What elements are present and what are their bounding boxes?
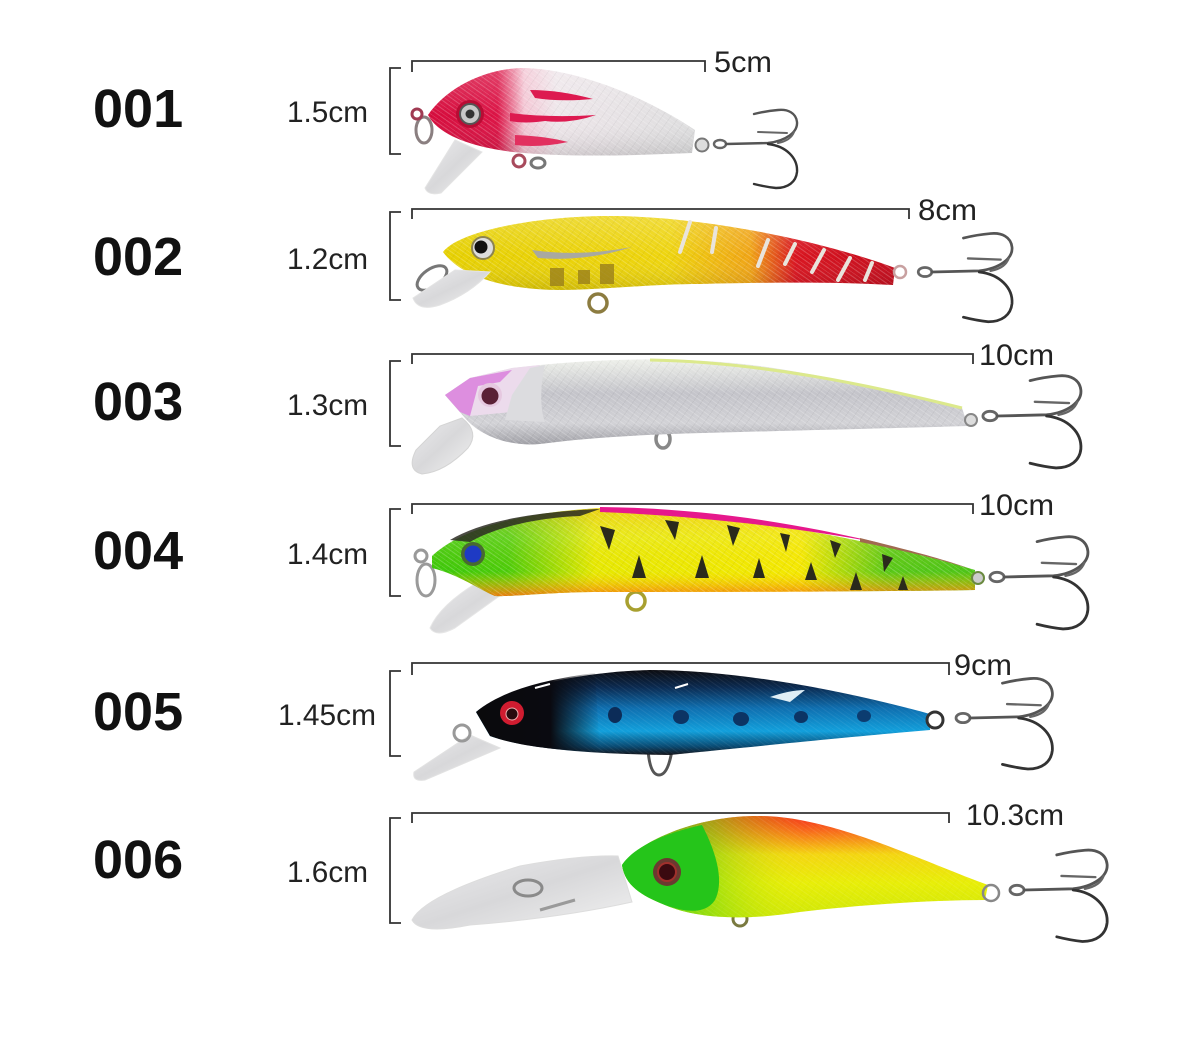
length label 10.3cm: 10.3cm <box>966 799 1064 832</box>
row 006 <box>93 799 1107 941</box>
height label 1.4cm: 1.4cm <box>287 538 368 571</box>
length bracket <box>412 354 973 364</box>
lure 001: pink and white <box>412 68 797 194</box>
model number 002: 002 <box>93 227 183 287</box>
row 001 <box>93 46 797 194</box>
length label 9cm: 9cm <box>954 649 1012 682</box>
model number 004: 004 <box>93 521 183 581</box>
row 004 <box>93 489 1088 633</box>
length bracket <box>412 504 973 514</box>
length bracket <box>412 663 949 675</box>
model number 005: 005 <box>93 682 183 742</box>
model number 006: 006 <box>93 830 183 890</box>
height bracket <box>390 68 401 154</box>
length bracket <box>412 813 949 823</box>
length label 10cm: 10cm <box>979 339 1054 372</box>
height bracket <box>390 361 401 446</box>
length label 8cm: 8cm <box>918 194 977 227</box>
lure 004: green yellow with spots <box>415 507 1088 633</box>
lure 006: green head yellow body <box>412 816 1107 941</box>
lure 003: silver with pink head <box>412 359 1081 474</box>
lure 002: yellow and red <box>413 216 1012 322</box>
model number 003: 003 <box>93 372 183 432</box>
model number 001: 001 <box>93 79 183 139</box>
height label 1.6cm: 1.6cm <box>287 856 368 889</box>
height bracket <box>390 509 401 596</box>
height label 1.45cm: 1.45cm <box>278 699 376 732</box>
height bracket <box>390 671 401 756</box>
height bracket <box>390 212 401 300</box>
height label 1.3cm: 1.3cm <box>287 389 368 422</box>
row 003 <box>93 339 1081 474</box>
length label 5cm: 5cm <box>714 46 772 79</box>
length label 10cm: 10cm <box>979 489 1054 522</box>
height label 1.5cm: 1.5cm <box>287 96 368 129</box>
row 002 <box>93 194 1012 322</box>
height label 1.2cm: 1.2cm <box>287 243 368 276</box>
lure 005: black and blue <box>414 670 1052 780</box>
length bracket <box>412 61 705 72</box>
height bracket <box>390 818 401 923</box>
row 005 <box>93 649 1052 780</box>
length bracket <box>412 209 909 219</box>
